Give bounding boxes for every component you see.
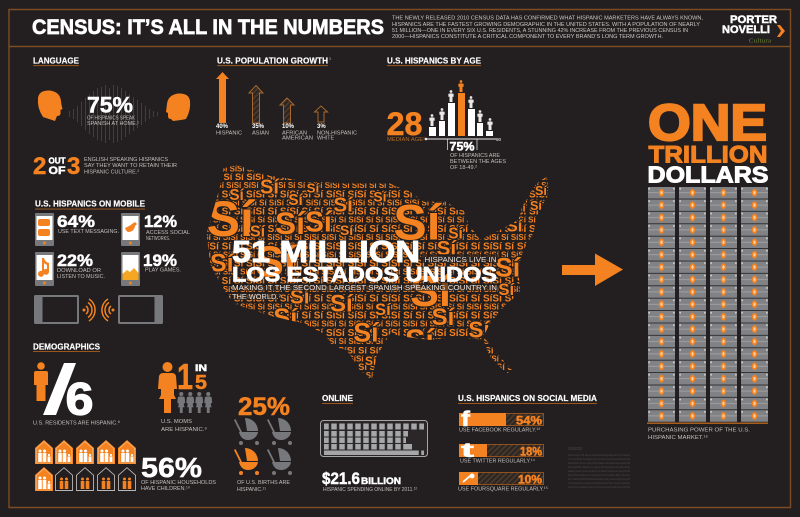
map: Si word map of USA: Sí	[307, 181, 321, 196]
map: Si word map of USA: Sí	[498, 280, 515, 299]
sound wave	[69, 85, 158, 143]
stat: 1 in 5: 5	[195, 372, 207, 394]
icon: households row	[35, 440, 136, 491]
panel: social media	[458, 394, 597, 492]
text: hispanics live in	[421, 254, 498, 264]
map: Si word map of USA: Sí	[365, 354, 377, 368]
icon: right tablet	[118, 295, 163, 324]
heading: population growth: 3	[329, 57, 331, 61]
arrow: non-hispanic white 3%	[314, 106, 328, 122]
labels: growth percentages: 3%	[317, 124, 326, 130]
map: Si word map of USA: Sí	[305, 207, 333, 239]
map: Si word map of USA: Sí Sí SíSí SíSí Sí SíSí Sí Sí SíSí SíSí Sí SíSí Sí Sí SíSí SíSí Sí SíSí Sí Sí SíSí SíSí Sí SíSí Sí Sí SíSí SíSí	[205, 198, 583, 207]
labels: growth groups: AFRICAN	[282, 130, 307, 136]
heading: population growth: U.S. POPULATION GROWTH	[217, 56, 328, 66]
stat: 75%: 75%	[87, 92, 133, 118]
caption: aged 18-49: BETWEEN THE AGES	[450, 159, 507, 165]
map: Si word map of USA: Sí Sí SíSí SíSí Sí SíSí Sí Sí SíSí SíSí Sí SíSí Sí Sí SíSí SíSí Sí SíSí Sí Sí SíSí SíSí Sí SíSí Sí Sí SíSí SíSí	[203, 320, 581, 329]
text: hispanics live in: HISPANICS LIVE IN	[424, 257, 496, 264]
icon: phone bird	[121, 213, 140, 246]
caption: twitter: USE TWITTER REGULARLY.¹⁴	[460, 458, 535, 464]
map: Si word map of USA: Sí	[288, 192, 304, 209]
map: Si word map of USA: Sí Sí SíSí SíSí Sí SíSí Sí Sí SíSí SíSí Sí SíSí Sí Sí SíSí SíSí Sí SíSí Sí Sí SíSí SíSí Sí SíSí Sí Sí SíSí SíSí	[203, 250, 581, 259]
map: Si word map of USA: Sí	[375, 300, 392, 319]
sources: Hispanic Births in the U.S. Kaiser Family Foundation, State Health Facts population 2010	[568, 461, 630, 465]
text: second largest country: MAKING IT THE SECOND LARGEST SPANISH SPEAKING COUNTRY IN	[232, 285, 497, 292]
caption: 25%: HISPANIC.¹¹	[237, 487, 266, 493]
age bar people	[429, 80, 493, 130]
map: Si word map of USA: Sí	[468, 316, 490, 342]
arrow: map to dollars	[562, 254, 623, 286]
labels: growth percentages: 10%	[282, 124, 295, 130]
panel: demographics	[33, 342, 292, 493]
icon: mom	[158, 362, 177, 413]
stat: los estados unidos: LOS ESTADOS UNIDOS	[232, 264, 497, 286]
map: Si word map of USA: SíSí Sí Sí SíSí Sí SíSí Sí Sí SíSí SíSí Sí SíSí Sí Sí SíSí SíSí Sí SíSí Sí Sí SíSí SíSí Sí SíSí Sí Sí SíSí	[200, 259, 651, 270]
labels: growth groups: AMERICAN	[282, 136, 313, 142]
icon: left head	[38, 90, 62, 121]
map: Si word map of USA: SíSí Sí Sí SíSí Sí SíSí Sí Sí SíSí SíSí Sí SíSí Sí Sí SíSí SíSí Sí SíSí Sí Sí SíSí SíSí Sí SíSí Sí Sí SíSí	[200, 241, 651, 252]
sources: U.S. Census Bureau, Pew Hispanic Center, American Community Survey 2009 results data	[568, 457, 630, 461]
icon: grey women	[177, 392, 212, 413]
map: Si word map of USA: Sí	[495, 253, 522, 283]
bar: facebook: 54%	[516, 416, 542, 428]
map: Si word map of USA: Sí	[273, 304, 298, 332]
sources: 2011. Yankelovich MONITOR Multicultural Marketing Study, Univision Insights report 2010	[568, 477, 630, 481]
map: Si word map of USA: Sí	[405, 324, 435, 358]
sources: SOURCES	[568, 446, 582, 451]
map: Si word map of USA: SíSí Sí Sí SíSí Sí SíSí Sí Sí SíSí SíSí Sí SíSí Sí Sí SíSí SíSí Sí SíSí Sí Sí SíSí SíSí Sí SíSí Sí Sí SíSí	[200, 224, 651, 235]
map: Si word map of USA: Sí Sí SíSí SíSí Sí SíSí Sí Sí SíSí SíSí Sí SíSí Sí Sí SíSí SíSí Sí SíSí Sí Sí SíSí SíSí Sí SíSí Sí Sí SíSí SíSí	[203, 233, 581, 242]
stat: 21.6 billion	[322, 469, 401, 488]
map: Si word map of USA: Sí	[393, 194, 443, 250]
map: Si word map of USA: SíSí Sí Sí SíSí Sí SíSí Sí Sí SíSí SíSí Sí SíSí Sí Sí SíSí SíSí Sí SíSí Sí Sí SíSí SíSí Sí SíSí Sí Sí SíSí	[200, 276, 651, 287]
caption: 64%: USE TEXT MESSAGING.	[58, 229, 119, 235]
map: Si word map of USA: SíSí Sí Sí SíSí Sí SíSí Sí Sí SíSí SíSí Sí SíSí Sí Sí SíSí SíSí Sí SíSí Sí Sí SíSí SíSí Sí SíSí Sí Sí SíSí	[203, 172, 624, 182]
header intro text: 2000—HISPANICS CONSTITUTE A CRITICAL COMPONENT TO EVERY BRAND’S LONG TERM GROWTH.	[392, 34, 663, 40]
caption: median age: MEDIAN AGE²	[387, 137, 425, 143]
panel: online	[320, 394, 428, 493]
map: Si word map of USA: Sí	[250, 224, 266, 241]
logo: Porter Novelli Cultura: PORTER	[730, 14, 777, 26]
stat: 1 in 5	[177, 356, 207, 397]
stat: 21.6 billion: $21.6	[322, 469, 360, 488]
arrow: african american 10%	[280, 98, 294, 123]
stat: 21.6 billion: BILLION	[361, 476, 401, 487]
heading: online: ONLINE	[322, 394, 354, 403]
icon: right head	[166, 93, 190, 121]
stat: 12%: 12%	[144, 212, 177, 231]
caption: 25%: OF U.S. BIRTHS ARE	[237, 480, 291, 486]
caption: aged 18-49	[450, 153, 507, 171]
heading: mobile: U.S. HISPANICS ON MOBILE	[35, 200, 146, 208]
caption: facebook: USE FACEBOOK REGULARLY.¹³	[459, 428, 540, 434]
logo: Porter Novelli Cultura	[722, 14, 785, 44]
caption: 12%	[146, 230, 190, 242]
heading: social media: U.S. HISPANICS ON SOCIAL MEDIA	[458, 394, 597, 403]
map: Si word map of USA: Sí	[353, 318, 380, 348]
money stacks	[648, 187, 768, 422]
bar: facebook	[459, 408, 544, 431]
header intro text: HISPANICS ARE THE FASTEST GROWING DEMOGRAPHIC IN THE UNITED STATES. WITH A POPULATION OF NEARLY	[392, 22, 700, 28]
caption: aged 18-49: OF HISPANICS ARE	[450, 153, 501, 159]
stat: median age 28: 28	[386, 106, 422, 142]
header intro text	[392, 16, 703, 40]
stat: 64%: 64%	[57, 212, 95, 231]
bar: foursquare: 10%	[518, 474, 542, 486]
panel: population growth	[216, 56, 357, 142]
heading: by age: U.S. HISPANICS BY AGE	[387, 56, 482, 66]
icon: phone messages	[35, 213, 54, 246]
age axis: 90	[496, 137, 502, 142]
caption: 75%: OF HISPANICS SPEAK	[87, 116, 135, 122]
map: Si word map of USA: Sí Sí SíSí SíSí Sí SíSí Sí Sí SíSí SíSí Sí SíSí Sí Sí SíSí SíSí Sí SíSí Sí Sí SíSí SíSí Sí SíSí Sí Sí SíSí SíSí	[210, 164, 588, 173]
caption: 25%	[237, 480, 291, 493]
labels: growth groups: ASIAN	[252, 130, 269, 136]
map: Si word map of USA: Sí Sí SíSí SíSí Sí SíSí Sí Sí SíSí SíSí Sí SíSí Sí Sí SíSí SíSí Sí SíSí Sí Sí SíSí SíSí Sí SíSí Sí Sí SíSí SíSí	[203, 268, 581, 277]
age bars	[429, 93, 493, 136]
stat: 25%: 25%	[238, 393, 290, 421]
sources: Hispanic Business Magazine, Purchasing Power of the U.S. Hispanic Market, Selig Center	[568, 473, 630, 477]
caption: 1 in 5: ARE HISPANIC.⁹	[161, 427, 207, 433]
bar: twitter: t	[461, 440, 475, 462]
stat: 1 in 5: IN	[195, 363, 207, 374]
map: Si word map of USA: Sí	[207, 191, 256, 247]
arrow: hispanic 40%	[216, 72, 229, 123]
stat: 1/6 slash	[43, 363, 76, 415]
caption: purchasing power: HISPANIC MARKET.¹⁶	[648, 435, 708, 441]
arrow: asian 35%	[249, 86, 263, 123]
panel: mobile	[34, 200, 190, 324]
map: Si word map of USA: Sí	[229, 187, 245, 204]
callout: 51 million	[232, 234, 498, 301]
panel: language	[33, 56, 190, 180]
sources: ¹Nielsen Insights, 2009. Hispanic Market Monitor language usage data for U.S. Hispanics	[568, 453, 630, 457]
map: Si word map of USA: SíSí Sí Sí SíSí Sí SíSí Sí Sí SíSí SíSí Sí SíSí Sí Sí SíSí SíSí Sí SíSí Sí Sí SíSí SíSí Sí SíSí Sí Sí SíSí	[200, 345, 620, 355]
map: Si word map of USA: SíSí Sí Sí SíSí Sí SíSí Sí Sí SíSí SíSí Sí SíSí Sí Sí SíSí SíSí Sí SíSí Sí Sí SíSí SíSí Sí SíSí Sí Sí SíSí	[200, 189, 651, 200]
icon: keyboard	[320, 420, 428, 456]
caption: 1 in 5: U.S. MOMS	[161, 419, 193, 425]
icon: phone music	[35, 252, 54, 286]
map: Si word map of USA: Sí	[333, 194, 354, 217]
labels: growth groups	[216, 130, 357, 142]
map: Si word map of USA: Sí	[432, 304, 456, 331]
map: Si word map of USA: Sí	[535, 184, 547, 198]
heading: demographics: DEMOGRAPHICS	[33, 342, 101, 352]
stat: 75% aged 18-49: 75%	[450, 140, 475, 154]
map: Si word map of USA: Sí	[515, 203, 527, 215]
icon: signal waves	[82, 299, 114, 321]
stat: 2 out of 3	[33, 153, 80, 180]
map: Si word map of USA: SíSí Sí Sí SíSí Sí SíSí Sí Sí SíSí SíSí Sí SíSí Sí Sí SíSí SíSí Sí SíSí Sí Sí SíSí SíSí Sí SíSí Sí Sí SíSí	[200, 362, 620, 372]
map: Si word map of USA: Sí Sí SíSí SíSí Sí SíSí Sí Sí SíSí SíSí Sí SíSí Sí Sí SíSí SíSí Sí SíSí Sí Sí SíSí SíSí Sí SíSí Sí Sí SíSí SíSí	[203, 285, 581, 294]
map: Si word map of USA: Sí Sí SíSí SíSí Sí SíSí Sí Sí SíSí SíSí Sí SíSí Sí Sí SíSí SíSí Sí SíSí Sí Sí SíSí SíSí Sí SíSí Sí Sí SíSí SíSí	[203, 216, 581, 225]
labels: growth percentages: 40%	[216, 124, 229, 130]
heading: trillion: TRILLION	[648, 142, 768, 168]
icon: phone games	[121, 252, 140, 286]
map: Si word map of USA: Sí	[437, 237, 457, 260]
stat: 1 in 5: 1	[177, 356, 193, 397]
map: Si word map of USA: SíSí Sí Sí SíSí Sí SíSí Sí Sí SíSí SíSí Sí SíSí Sí Sí SíSí SíSí Sí SíSí Sí Sí SíSí SíSí Sí SíSí Sí Sí SíSí	[200, 328, 651, 339]
map: Si word map of USA: Sí	[210, 250, 235, 278]
map: Si word map of USA: Sí Sí SíSí SíSí Sí SíSí Sí Sí SíSí SíSí Sí SíSí Sí Sí SíSí SíSí Sí SíSí Sí Sí SíSí SíSí Sí SíSí Sí Sí SíSí SíSí	[207, 181, 584, 190]
icon: man	[34, 362, 48, 401]
map: Si word map of USA: SíSí Sí Sí SíSí Sí SíSí Sí Sí SíSí SíSí Sí SíSí Sí Sí SíSí SíSí Sí SíSí Sí Sí SíSí SíSí Sí SíSí Sí Sí SíSí	[200, 293, 651, 304]
caption: online spending: HISPANIC SPENDING ONLINE BY 2011.¹²	[323, 487, 417, 493]
labels: growth groups: WHITE	[317, 136, 335, 142]
sources	[568, 446, 630, 489]
caption: 22%	[57, 268, 105, 280]
map: Si word map of USA	[206, 166, 548, 378]
caption: foursquare: USE FOURSQUARE REGULARLY.¹⁵	[458, 486, 548, 492]
labels: growth percentages: 35%	[252, 124, 265, 130]
header intro text: 51 MILLION—ONE IN EVERY SIX U.S. RESIDENTS, A STUNNING 42% INCREASE FROM THE PREVIOUS CENSUS IN	[392, 28, 688, 34]
bar: twitter: 18%	[520, 446, 542, 458]
icon: strollers	[234, 418, 292, 475]
stat: 19%: 19%	[143, 251, 177, 270]
map: Si word map of USA: Sí	[275, 205, 306, 241]
map: Si word map of USA: Sí	[507, 217, 524, 236]
caption: 1/6: U.S. RESIDENTS ARE HISPANIC.⁸	[33, 420, 120, 426]
stat: 22%: 22%	[57, 251, 93, 270]
stack base	[647, 422, 768, 424]
map: Si word map of USA: Sí Sí SíSí SíSí Sí SíSí Sí Sí SíSí SíSí Sí SíSí Sí Sí SíSí SíSí Sí SíSí Sí Sí SíSí SíSí Sí SíSí Sí Sí SíSí SíSí	[203, 337, 581, 346]
caption: 1 in 5	[161, 419, 207, 433]
labels: growth percentages	[216, 124, 326, 130]
header intro text: THE NEWLY RELEASED 2010 CENSUS DATA HAS CONFIRMED WHAT HISPANIC MARKETERS HAVE ALWAYS KNOWN,	[392, 16, 703, 22]
caption: purchasing power	[648, 428, 750, 441]
caption: 2 out of 3: ENGLISH SPEAKING HISPANICS	[84, 157, 169, 163]
logo: Porter Novelli Cultura: NOVELLI	[722, 24, 770, 36]
sources: The Pew Research Center Hispanic Social Media Study and Project, Internet & American Life	[568, 481, 630, 485]
sources: eMarketer, Hispanic Internet Users Report, Pew Research, Mobile Access Study, 2010 data	[568, 469, 630, 473]
labels: growth groups: NON-HISPANIC	[317, 130, 357, 136]
map: Si word map of USA: Sí	[260, 176, 280, 198]
caption: 12%: ACCESS SOCIAL	[146, 230, 190, 236]
bar: twitter	[459, 440, 544, 462]
caption: purchasing power: PURCHASING POWER OF THE U.S.	[648, 428, 750, 434]
caption: 2 out of 3: HISPANIC CULTURE.²	[84, 170, 139, 176]
stat: 56%: 56%	[141, 452, 202, 483]
sources: Multicultural Market Intelligence, Inc., Hispanic Online Spending Forecast, 2011 summary	[568, 465, 630, 469]
text: second largest country: THE WORLD.⁷	[232, 294, 281, 301]
text: second largest country	[232, 283, 498, 301]
heading: one: ONE	[648, 94, 767, 151]
caption: 22%: LISTEN TO MUSIC.	[57, 274, 105, 280]
map: Si word map of USA: Sí	[410, 268, 453, 316]
map: Si word map of USA: Sí Sí SíSí SíSí Sí SíSí Sí Sí SíSí SíSí Sí SíSí Sí Sí SíSí SíSí Sí SíSí Sí Sí SíSí SíSí Sí SíSí Sí Sí SíSí SíSí	[203, 371, 581, 380]
caption: 2 out of 3	[84, 157, 177, 176]
caption: 75%: SPANISH AT HOME.¹	[87, 121, 139, 127]
map: Si word map of USA: Sí	[340, 222, 354, 238]
caption: 75%	[87, 116, 139, 127]
map: Si word map of USA: SíSí Sí Sí SíSí Sí SíSí Sí Sí SíSí SíSí Sí SíSí Sí Sí SíSí SíSí Sí SíSí Sí Sí SíSí SíSí Sí SíSí Sí Sí SíSí	[200, 311, 651, 322]
heading: dollars: DOLLARS	[648, 162, 768, 188]
map: Si word map of USA: Sí	[330, 291, 354, 318]
icon: left tablet	[34, 295, 79, 324]
stat: 2 out of 3: 3	[67, 153, 80, 180]
panel: one trillion dollars	[647, 94, 768, 441]
map: Si word map of USA: Sí Sí SíSí SíSí Sí SíSí Sí Sí SíSí SíSí Sí SíSí Sí Sí SíSí SíSí Sí SíSí Sí Sí SíSí SíSí Sí SíSí Sí Sí SíSí SíSí	[203, 302, 581, 311]
stat: 2 out of 3: OUT	[48, 156, 66, 166]
stat: 6: 6	[66, 374, 94, 424]
map: Si word map of USA: Sí	[448, 225, 464, 242]
stat: 51 million: 51 MILLION	[232, 234, 420, 269]
caption: 2 out of 3: SAY THEY WANT TO RETAIN THEIR	[84, 163, 177, 169]
heading: language: LANGUAGE	[33, 56, 80, 66]
caption: 56%	[141, 480, 217, 492]
caption: 19%: PLAY GAMES.	[145, 268, 181, 274]
panel: hispanics by age	[386, 56, 507, 171]
stat: 2 out of 3: OF	[48, 165, 66, 177]
caption: 56%: OF HISPANIC HOUSEHOLDS	[141, 480, 217, 486]
stat: 2 out of 3: 2	[33, 153, 46, 180]
map: Si word map of USA: Sí	[530, 199, 542, 213]
map: Si word map of USA: Sí	[373, 189, 388, 205]
map: Si word map of USA: Sí Sí SíSí SíSí Sí SíSí Sí Sí SíSí SíSí Sí SíSí Sí Sí SíSí SíSí Sí SíSí Sí Sí SíSí SíSí Sí SíSí Sí Sí SíSí SíSí	[203, 354, 581, 363]
logo: Porter Novelli Cultura: Cultura	[749, 38, 771, 44]
caption: 56%: HAVE CHILDREN.¹⁰	[141, 486, 190, 492]
caption: 12%: NETWORKS.	[146, 236, 170, 242]
labels: growth groups: HISPANIC	[216, 130, 242, 136]
map: Si word map of USA: Sí	[290, 285, 311, 308]
bar: facebook: f	[461, 408, 471, 431]
caption: 22%: DOWNLOAD OR	[57, 268, 101, 274]
title: CENSUS: IT’S ALL IN THE NUMBERS	[32, 16, 384, 39]
map: Si word map of USA: Sí	[255, 239, 298, 287]
map: Si word map of USA: SíSí Sí Sí SíSí Sí SíSí Sí Sí SíSí SíSí Sí SíSí Sí Sí SíSí SíSí Sí SíSí Sí Sí SíSí SíSí Sí SíSí Sí Sí SíSí	[200, 207, 651, 218]
sources: Latinos Online, Pew Research Center, Census Bureau Current Population Survey, 2010 data	[568, 485, 630, 489]
caption: aged 18-49: OF 18-49.²	[450, 165, 477, 171]
